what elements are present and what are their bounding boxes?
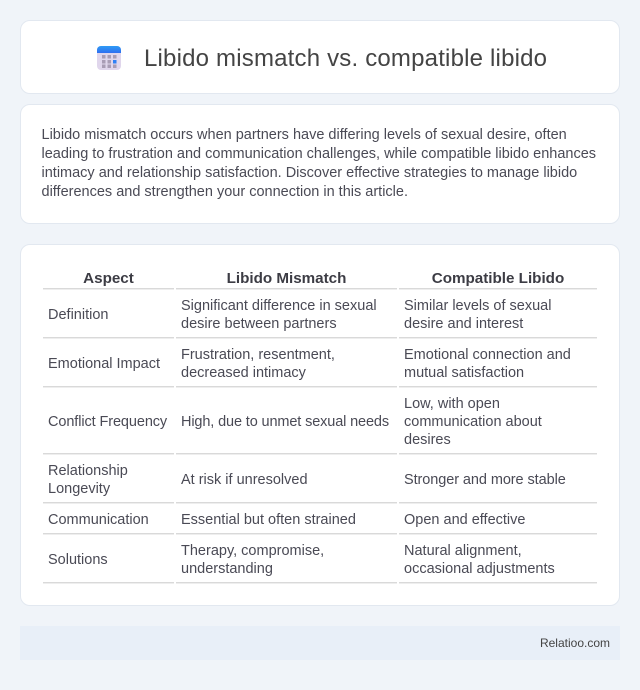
row: Conflict Frequency: desires (404, 432, 451, 448)
row: Communication: Essential but often strained (181, 512, 356, 528)
panel: title card (20, 20, 620, 94)
title: Libido mismatch vs. compatible libido (144, 45, 547, 72)
row: Definition: Similar levels of sexual (404, 298, 551, 314)
intro text (42, 127, 596, 200)
row: Relationship Longevity (48, 463, 566, 497)
row: Definition: desire between partners (181, 316, 337, 332)
row: Solutions: Solutions (48, 552, 108, 568)
table header (83, 270, 564, 287)
row: Emotional Impact: mutual satisfaction (404, 365, 524, 381)
intro text: leading to frustration and communication challenges, while compatible libido enhances (42, 146, 596, 162)
row: Conflict Frequency: Low, with open (404, 396, 500, 412)
comparison table (43, 270, 597, 584)
row: Definition (48, 298, 551, 332)
row: Solutions: Natural alignment, (404, 543, 522, 559)
intro text: differences and strengthen your connection in this article. (42, 184, 408, 200)
row: Conflict Frequency: High, due to unmet sexual needs (181, 414, 389, 430)
row: Definition: Significant difference in sexual (181, 298, 377, 314)
row: Communication: Communication (48, 512, 149, 528)
icon: calendar (97, 46, 121, 70)
row: Emotional Impact: decreased intimacy (181, 365, 306, 381)
row: Emotional Impact: Emotional connection and (404, 347, 571, 363)
row: Definition: Definition (48, 307, 108, 323)
row: Solutions: understanding (181, 561, 273, 577)
table header: Compatible Libido (432, 270, 564, 287)
row: Solutions: occasional adjustments (404, 561, 555, 577)
row: Relationship Longevity: At risk if unresolved (181, 472, 308, 488)
row: Conflict Frequency (48, 396, 542, 448)
row: Emotional Impact: Frustration, resentment, (181, 347, 335, 363)
panel: comparison table (20, 244, 620, 606)
row: Relationship Longevity: Longevity (48, 481, 110, 497)
footer credit: Relatioo.com (540, 636, 610, 650)
footer bar (20, 626, 620, 660)
row: Conflict Frequency: Conflict Frequency (48, 414, 167, 430)
row: Relationship Longevity: Relationship (48, 463, 128, 479)
row: Solutions: Therapy, compromise, (181, 543, 324, 559)
row: Relationship Longevity: Stronger and more stable (404, 472, 566, 488)
table header: Libido Mismatch (227, 270, 346, 287)
intro text: Libido mismatch occurs when partners have differing levels of sexual desire, often (42, 127, 567, 143)
row: Conflict Frequency: communication about (404, 414, 542, 430)
row: Solutions (48, 543, 555, 577)
table header: Aspect (83, 270, 134, 287)
row: Definition: desire and interest (404, 316, 523, 332)
row: Communication: Open and effective (404, 512, 525, 528)
row: Emotional Impact: Emotional Impact (48, 356, 160, 372)
row: Emotional Impact (48, 347, 571, 381)
row: Communication (48, 512, 525, 528)
intro text: intimacy and relationship satisfaction. Discover effective strategies to manage libido (42, 165, 577, 181)
panel: intro (20, 104, 620, 224)
